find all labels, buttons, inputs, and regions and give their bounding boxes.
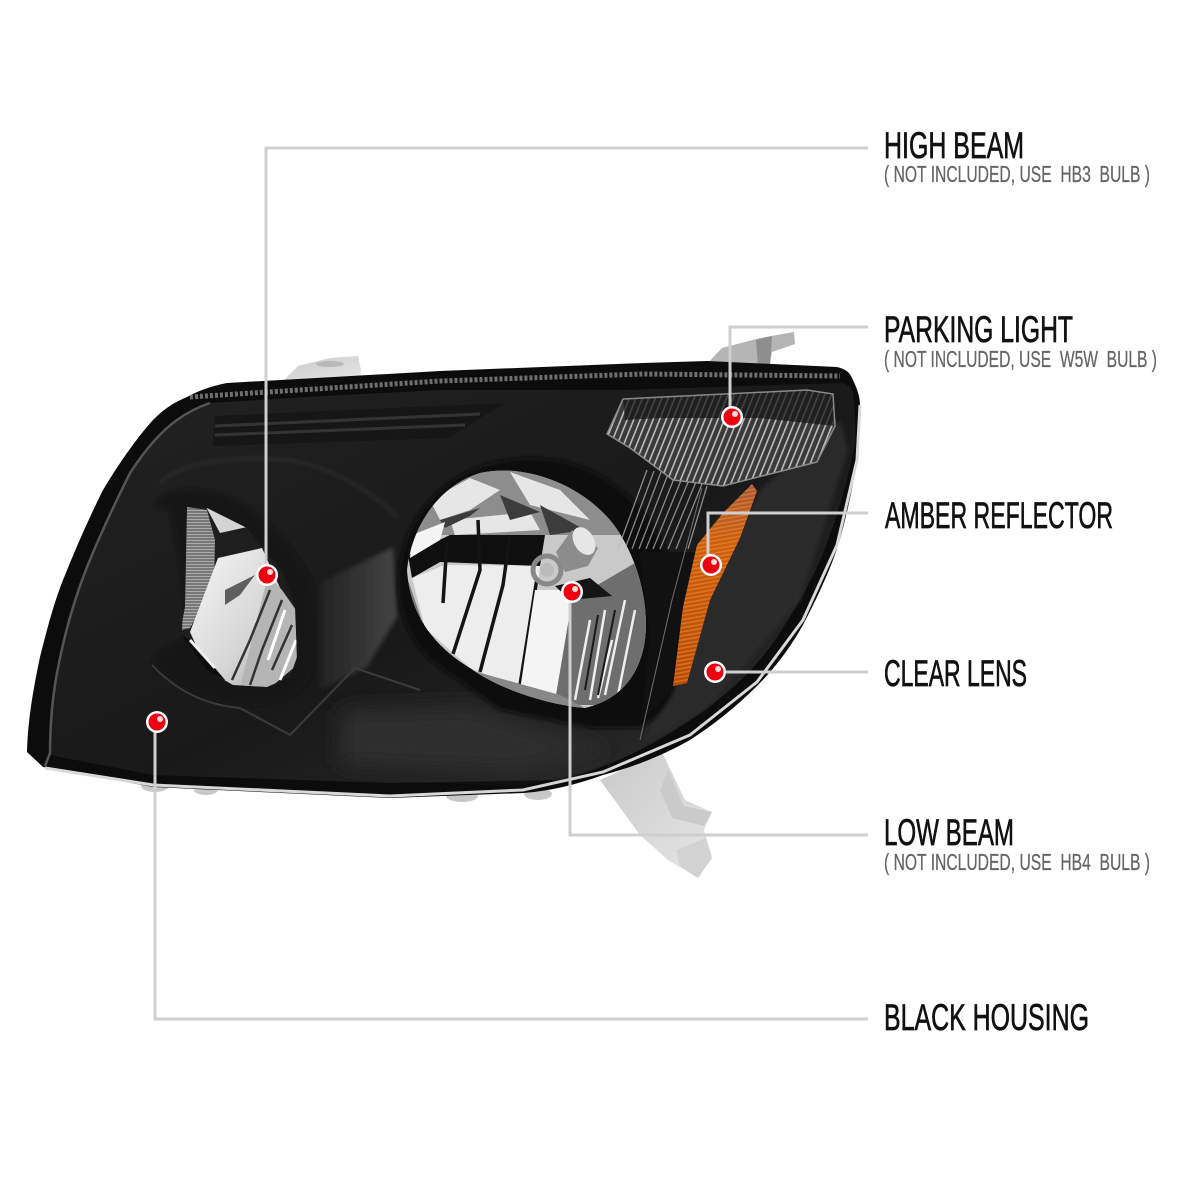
label: black housing: BLACK HOUSING [884,997,1089,1038]
side lighter panel [640,420,848,745]
callout line: clear lens [724,670,868,674]
infographic canvas [27,132,1156,1031]
bottom mounting bumps [141,780,552,802]
callout line: parking light [730,327,868,408]
black inner bezel [50,383,855,783]
label: parking light: PARKING LIGHT [884,309,1073,350]
left chrome reflector [182,507,297,687]
black panel beside reflector [640,552,695,722]
amber reflector [673,484,757,686]
callout line: high beam [266,148,868,566]
rib lines below parking light [618,470,707,549]
marker: parking light [721,406,743,428]
marker: high beam [256,564,278,586]
label: high beam: HIGH BEAM [884,125,1024,166]
left bezel swoosh [160,458,397,517]
marker: clear lens [704,661,726,683]
label: clear lens: CLEAR LENS [884,653,1027,694]
bracket: top right mount [705,332,795,372]
marker: low beam [561,581,583,603]
bottom clear lens edge [45,405,860,796]
right reflector ring [398,458,682,728]
label: parking light [884,309,1157,372]
housing outer shell [27,361,860,798]
bulb socket [533,523,612,600]
bracket: top left mount [284,356,361,380]
top lens highlight [190,374,840,397]
callout line: amber reflector [708,513,868,556]
lower body glow [340,705,610,772]
bracket: lower mount [600,752,712,878]
dark ring around left reflector [152,490,313,705]
lighter side panel [320,547,397,690]
right chrome reflector [407,470,646,708]
clear lens rim [45,403,210,766]
label: high beam [884,125,1150,187]
top ribbed vents [213,403,505,446]
lower left trim lines [152,665,420,735]
headlight assembly [27,332,860,878]
marker: black housing [146,711,168,733]
label: low beam [884,812,1150,875]
thin lens seam [640,488,702,740]
parking light lens [607,390,835,486]
callout line: low beam [570,602,868,835]
callout line: black housing [155,732,868,1019]
label: low beam: LOW BEAM [884,812,1014,853]
marker: amber reflector [700,554,722,576]
